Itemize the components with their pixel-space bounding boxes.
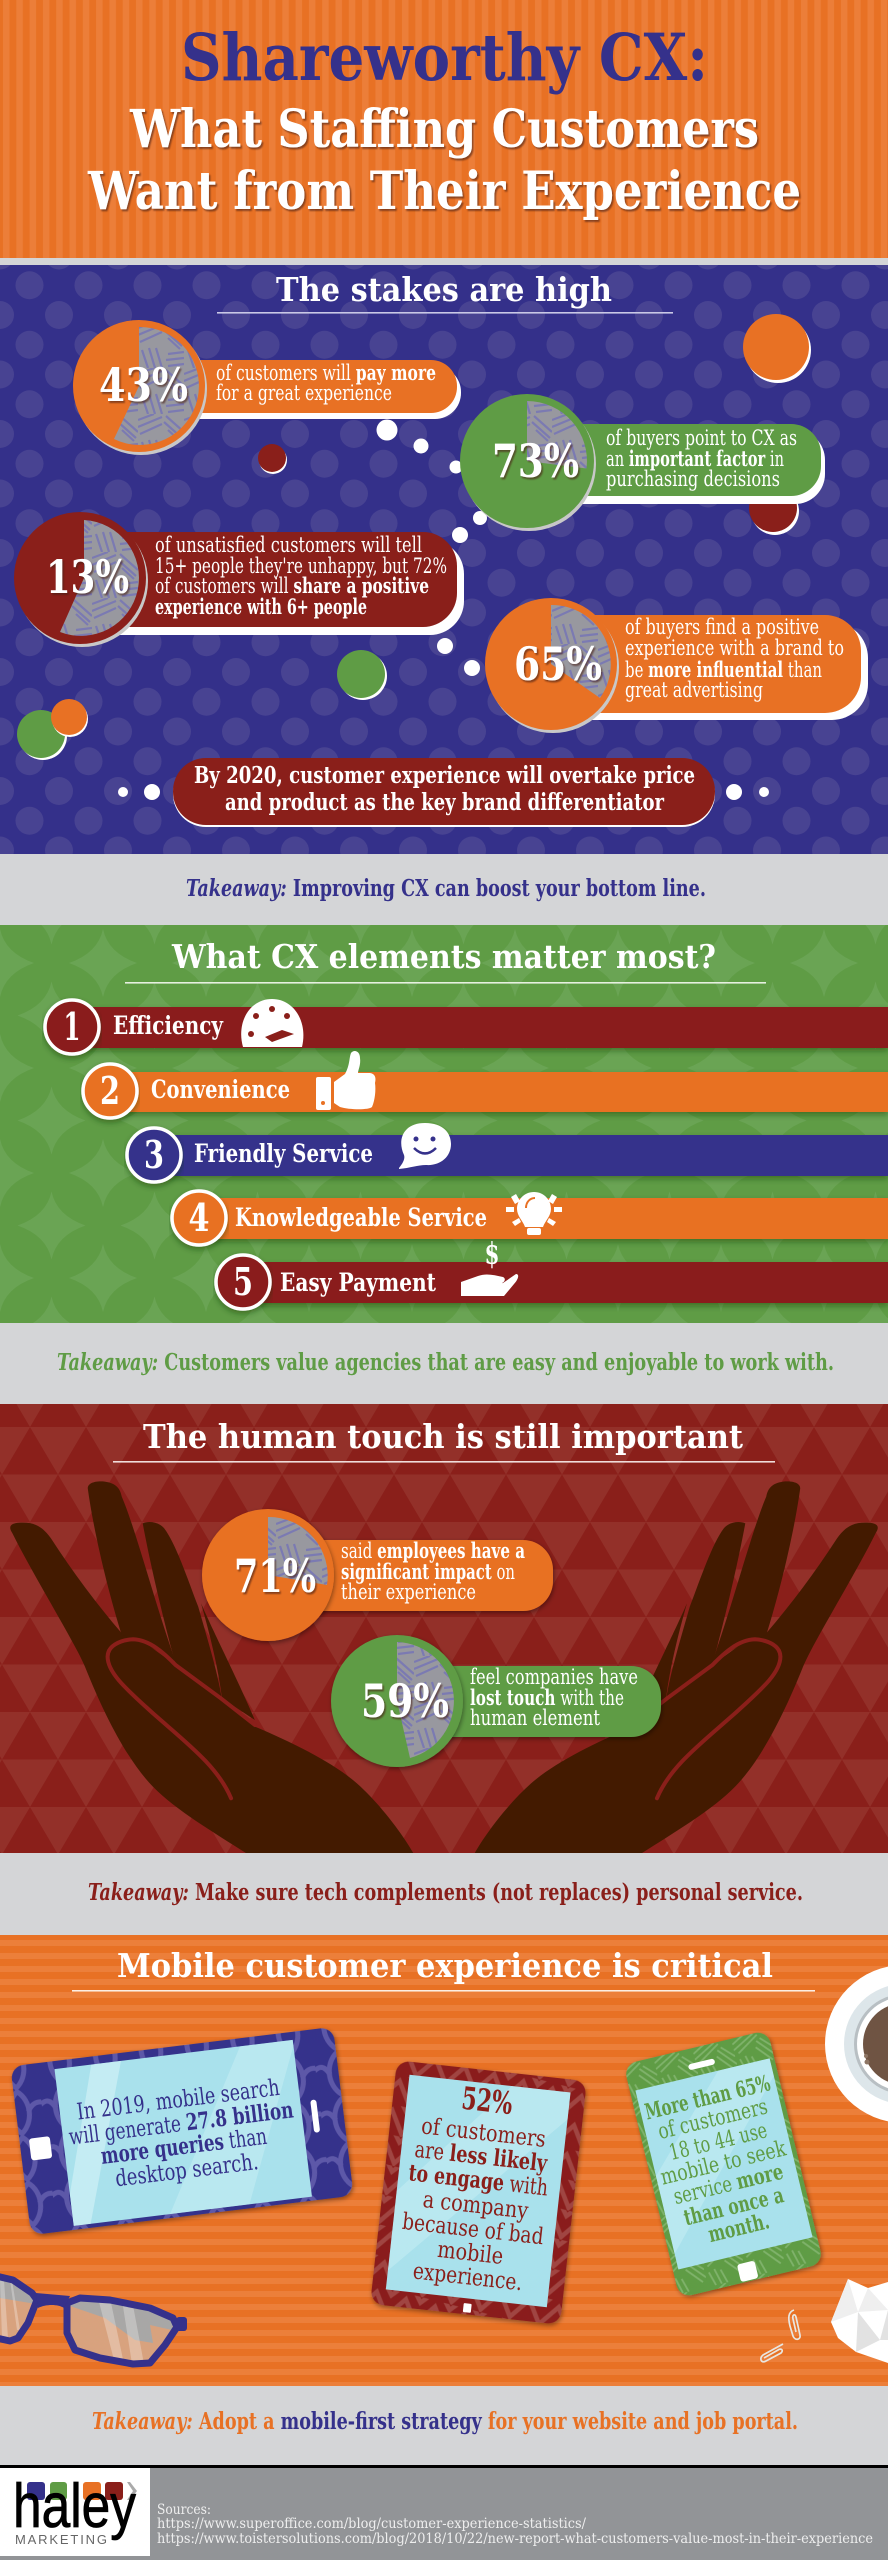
- callout: by 2020: and product as the key brand differentiator: [225, 789, 665, 816]
- tablet: less likely to engage: a company: [421, 2187, 530, 2224]
- tablet: less likely to engage: are less likely: [413, 2136, 549, 2177]
- item 1: efficiency: 1: [64, 1004, 80, 1049]
- icon: smile chat: [399, 1123, 451, 1169]
- phone: more than 65%: of customers: [656, 2095, 770, 2145]
- stat: 59%: lost touch with the: [470, 1685, 624, 1710]
- stat: 59%: human element: [470, 1706, 600, 1730]
- takeaway 2: [0, 1323, 888, 1404]
- panel: the stakes are high: [0, 265, 888, 854]
- stat: 13%: experience with 6+ people: [155, 594, 367, 619]
- icon: gauge: [241, 999, 303, 1047]
- tablet: mobile search: more queries than: [99, 2123, 269, 2170]
- stat: 13%: [14, 512, 464, 647]
- heading: mobile: Mobile customer experience is critical: [117, 1946, 773, 1985]
- stat: 71%: said employees have a: [341, 1538, 525, 1563]
- tablet: less likely to engage: experience.: [412, 2258, 524, 2296]
- phone: more than 65%: service more: [671, 2159, 786, 2210]
- item 4: knowledgeable service: [172, 1191, 888, 1245]
- stat: 73%: 73%: [492, 434, 579, 488]
- stat: 43%: of customers will pay more: [216, 360, 436, 385]
- sources text: Sources:: [157, 2502, 211, 2518]
- heading: the stakes are high: The stakes are high: [276, 270, 612, 309]
- tablet: mobile search: will generate 27.8 billion: [67, 2096, 295, 2151]
- item 4: knowledgeable service: 4: [188, 1195, 210, 1240]
- panel: the human touch: [0, 1404, 888, 1853]
- takeaway 1: Takeaway: Improving CX can boost your bottom line.: [186, 875, 706, 902]
- stat: 59%: 59%: [361, 1674, 449, 1728]
- stat: 73%: an important factor in: [606, 446, 784, 471]
- stat: 13%: of customers will share a positive: [155, 573, 429, 598]
- illustration: coffee cup: [825, 1965, 888, 2123]
- stat: 65%: [485, 598, 868, 733]
- tablet: mobile search: [10, 2027, 354, 2235]
- icon: hand with dollar: $: [484, 1237, 500, 1272]
- phone: more than 65%: More than 65%: [642, 2070, 773, 2125]
- sources text: [157, 2502, 873, 2547]
- stat: 71%: significant impact on: [341, 1559, 515, 1584]
- stat: 65%: 65%: [514, 637, 602, 691]
- illustration: paper clips: [761, 2310, 800, 2362]
- stat: 13%: 13%: [46, 550, 129, 604]
- tablet: less likely to engage: because of bad: [401, 2209, 545, 2250]
- item 3: friendly service: Friendly Service: [194, 1139, 373, 1168]
- panel: mobile customer experience: [0, 1935, 888, 2386]
- item 5: easy payment: 5: [233, 1259, 253, 1304]
- icon: hand with dollar: [461, 1237, 518, 1296]
- stat: 13%: 15+ people they're unhappy, but 72%: [155, 554, 447, 578]
- item 5: easy payment: [216, 1237, 888, 1309]
- heading: CX elements: What CX elements matter most?: [171, 937, 716, 976]
- stat: 13%: of unsatisfied customers will tell: [155, 533, 422, 557]
- tablet: mobile search: In 2019, mobile search: [75, 2075, 281, 2126]
- item 3: friendly service: 3: [144, 1132, 164, 1177]
- item 3: friendly service: [127, 1123, 888, 1182]
- logo: haley marketing: haley: [13, 2472, 136, 2541]
- panel: footer: [0, 2465, 888, 2560]
- tablet: less likely to engage: mobile: [436, 2237, 504, 2270]
- title lines 2-3: [87, 99, 801, 222]
- item 5: easy payment: Easy Payment: [280, 1268, 436, 1297]
- stat: 65%: great advertising: [625, 678, 763, 702]
- decorative bubbles: [17, 314, 811, 800]
- tablet: less likely to engage: 52%: [460, 2081, 514, 2122]
- icon: lightbulb: [506, 1192, 562, 1235]
- stat: 59%: feel companies have: [470, 1665, 638, 1689]
- illustration: cupped hands: [10, 1481, 878, 1853]
- logo: haley marketing: MARKETING: [15, 2532, 107, 2547]
- item 2: convenience: [83, 1051, 888, 1118]
- phone: more than 65%: month.: [706, 2208, 772, 2248]
- stat: 43%: for a great experience: [216, 381, 392, 405]
- item 2: convenience: 2: [100, 1068, 120, 1113]
- item 1: efficiency: [45, 999, 888, 1054]
- title lines 2-3: Want from Their Experience: [87, 161, 801, 222]
- illustration: glasses: [0, 2276, 187, 2364]
- title lines 2-3: What Staffing Customers: [129, 99, 759, 160]
- stat: 73%: of buyers point to CX as: [606, 426, 797, 450]
- item 4: knowledgeable service: Knowledgeable Service: [235, 1203, 487, 1232]
- title line 1: Shareworthy CX:: [181, 20, 708, 96]
- takeaway 1: [0, 854, 888, 925]
- takeaway 3: [0, 1853, 888, 1935]
- tablet: less likely to engage: of customers: [420, 2113, 547, 2153]
- stat: 65%: be more influential than: [625, 657, 822, 682]
- phone: more than 65%: [624, 2030, 823, 2298]
- stat: 71%: their experience: [341, 1580, 476, 1604]
- sources text: https://www.superoffice.com/blog/customer-experience-statistics/: [157, 2516, 586, 2532]
- callout: by 2020: [173, 758, 715, 827]
- phone: more than 65%: than once a: [681, 2182, 786, 2231]
- stat: 71%: 71%: [234, 1549, 316, 1603]
- tablet: less likely to engage: to engage with: [407, 2159, 550, 2202]
- item 1: efficiency: Efficiency: [113, 1011, 224, 1040]
- panel: what CX elements matter most: [0, 925, 888, 1323]
- stat: 43%: 43%: [99, 358, 188, 412]
- item 2: convenience: Convenience: [151, 1075, 290, 1104]
- panel: header: [0, 0, 888, 258]
- stat: 43%: [73, 320, 461, 455]
- stat: 73%: [460, 394, 825, 531]
- callout: by 2020: By 2020, customer experience will overtake price: [194, 762, 695, 789]
- stat: 73%: purchasing decisions: [606, 467, 780, 491]
- tablet: less likely to engage: [370, 2060, 587, 2325]
- takeaway 4: Takeaway: Adopt a mobile-first strategy for your website and job portal.: [92, 2408, 798, 2435]
- takeaway 4: [0, 2386, 888, 2465]
- illustration: crumpled paper: [831, 2279, 888, 2363]
- stat: 65%: of buyers find a positive: [625, 615, 819, 639]
- phone: more than 65%: mobile to seek: [658, 2136, 789, 2191]
- stat: 71%: [202, 1509, 553, 1641]
- logo: haley marketing: [0, 2468, 150, 2556]
- phone: more than 65%: 18 to 44 use: [667, 2118, 770, 2166]
- stat: 59%: [331, 1635, 661, 1767]
- heading: human touch: The human touch is still important: [143, 1417, 744, 1456]
- icon: thumbs up: [316, 1051, 375, 1110]
- tablet: mobile search: desktop search.: [114, 2149, 260, 2192]
